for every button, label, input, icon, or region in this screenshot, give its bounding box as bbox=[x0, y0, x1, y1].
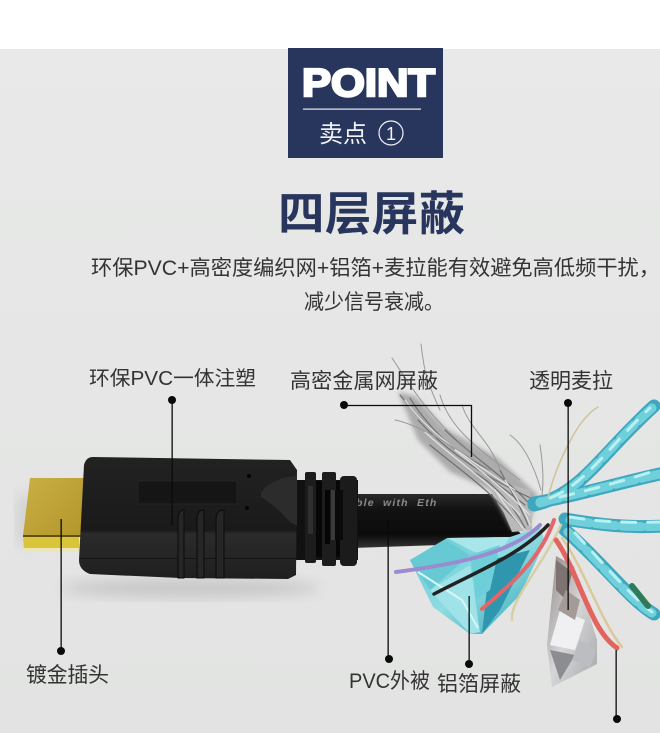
callout: environmental PVC molding bbox=[89, 367, 256, 525]
badge: POINT selling point 1 bbox=[288, 48, 443, 158]
inner colored wires bbox=[396, 407, 598, 620]
aluminium foil strip, silver bbox=[547, 556, 597, 687]
connector body bbox=[79, 457, 297, 579]
twisted pair ribbons bbox=[534, 406, 660, 614]
callout: aluminium foil shield: 铝箔屏蔽 bbox=[437, 673, 521, 696]
callout: environmental PVC molding: 环保PVC一体注塑 bbox=[89, 367, 256, 390]
callout: transparent mylar: 透明麦拉 bbox=[529, 370, 613, 393]
cable jacket bbox=[352, 494, 525, 548]
product photo: HDMI cable bbox=[18, 344, 660, 687]
strain relief grommet bbox=[296, 472, 358, 566]
aluminium foil shield, cyan bbox=[410, 527, 545, 634]
heading: 四层屏蔽 bbox=[278, 188, 465, 240]
callout: high density metal mesh: 高密金属网屏蔽 bbox=[290, 370, 438, 393]
callout: aluminium foil shield bbox=[437, 596, 521, 696]
callout: PVC jacket bbox=[349, 520, 430, 693]
callout: unlabeled bottom right marker bbox=[613, 650, 621, 723]
description text: 环保PVC+高密度编织网+铝箔+麦拉能有效避免高低频干扰， bbox=[91, 257, 660, 280]
callout: gold plated plug: 镀金插头 bbox=[26, 664, 109, 687]
connector shadow bbox=[60, 579, 320, 597]
callout: transparent mylar bbox=[529, 370, 613, 610]
callout: high density metal mesh bbox=[290, 370, 472, 457]
description text bbox=[91, 257, 660, 314]
gold plug bbox=[18, 478, 84, 552]
badge: POINT selling point 1: POINT bbox=[302, 62, 435, 105]
badge: POINT selling point 1: 1 bbox=[386, 124, 396, 144]
description text: 减少信号衰减。 bbox=[304, 291, 444, 314]
metal mesh shield bbox=[392, 344, 543, 532]
callout: gold plated plug bbox=[26, 519, 109, 687]
cable print: ble with Eth bbox=[356, 497, 438, 509]
red and beige wires bbox=[556, 538, 622, 648]
callout: PVC jacket: PVC外被 bbox=[349, 670, 430, 693]
badge: POINT selling point 1: 卖点 bbox=[319, 121, 367, 148]
connector ridges bbox=[178, 510, 224, 578]
